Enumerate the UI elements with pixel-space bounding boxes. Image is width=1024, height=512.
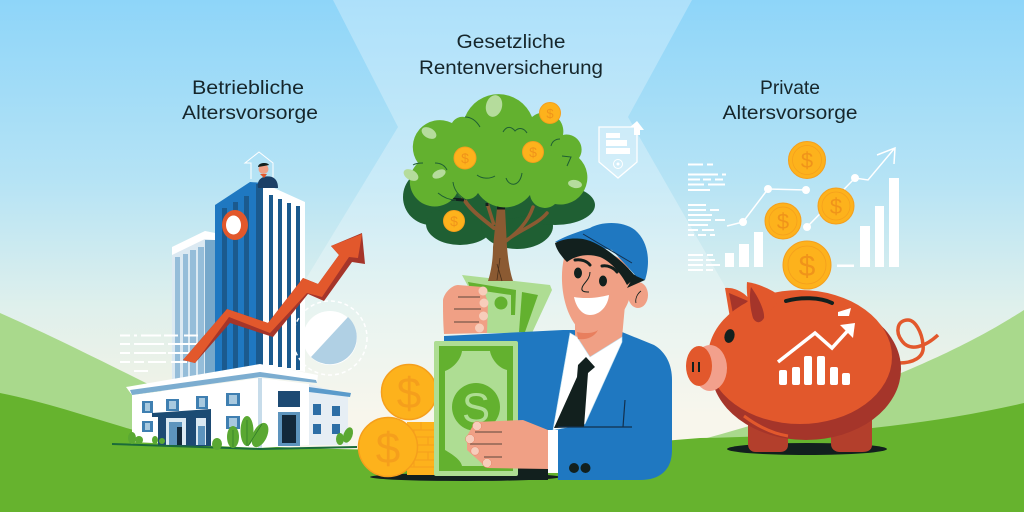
icon: blue suit: [444, 330, 672, 480]
icon: person on roof with house outline: [245, 152, 278, 188]
icon: falling coin: $: [801, 148, 813, 173]
icon: large coin: $: [376, 424, 400, 473]
title: Gesetzliche Rentenversicherung: [419, 31, 603, 79]
icon: falling coin: $: [830, 194, 842, 219]
icon: coin on tree: [454, 147, 476, 169]
icon: falling coin: [788, 142, 826, 178]
icon: bushes and ground line: [112, 416, 357, 450]
icon: coin on tree: [444, 210, 464, 232]
icon: large coin: [382, 364, 436, 420]
icon: building entrance: [152, 409, 211, 446]
icon: upper hand: [443, 285, 488, 334]
title: Private Altersvorsorge: Private: [760, 77, 820, 99]
icon: white shirt and collar: [553, 333, 622, 430]
icon: foliage detail lines: [413, 117, 571, 200]
icon: tree trunk and branches: [451, 197, 547, 281]
icon: front banknote: S: [462, 384, 490, 431]
panel: company building with growth arrow: [112, 152, 367, 450]
text lines: data list: [120, 336, 198, 371]
icon: back bills held in hand: [462, 275, 552, 333]
icon: large coin: [358, 418, 418, 476]
icon: coin on tree: $: [450, 213, 458, 229]
icon: coin on tree: $: [461, 150, 469, 166]
icon: right wing of lower building: [309, 384, 351, 445]
icon: suit pocket and buttons: [558, 400, 632, 473]
title: Betriebliche Altersvorsorge: Altersvorsorge: [182, 102, 318, 124]
icon: black tie: [554, 357, 595, 428]
icon: green tree crown: [410, 94, 587, 208]
icon: blue cap: [555, 223, 648, 285]
icon: pension shield: [599, 121, 644, 178]
icon: coin on tree: [522, 142, 544, 162]
icon: coin on tree: $: [546, 106, 554, 121]
icon: lower white building: [126, 364, 318, 448]
icon: falling coin: [783, 241, 831, 289]
icon: coin on tree: $: [529, 144, 537, 160]
right light hill: [707, 310, 1024, 470]
icon: ground shadow: [370, 468, 560, 481]
arrow: rising red arrow: [183, 233, 365, 363]
title: Private Altersvorsorge: Altersvorsorge: [722, 102, 858, 124]
icon: lower hand and cuff: [466, 420, 558, 473]
left light hill: [0, 313, 230, 460]
bar chart: left bars: [725, 232, 763, 267]
icon: large coin: $: [397, 369, 421, 418]
bar chart: right bars: [837, 178, 899, 267]
icon: falling coin: $: [777, 209, 789, 234]
line chart: left line: [727, 186, 810, 226]
icon: main blue tower: [215, 182, 305, 375]
line chart: right rising arrow: [804, 148, 895, 230]
icon: front banknote: [434, 341, 518, 476]
green ground: [0, 393, 1024, 512]
title: Betriebliche Altersvorsorge: [182, 77, 318, 124]
title: Betriebliche Altersvorsorge: Betriebliche: [192, 77, 304, 99]
text lines: data list: [688, 164, 726, 270]
icon: man's head: [562, 240, 648, 339]
panel: man holding money: [358, 223, 672, 481]
icon: dark back foliage: [403, 160, 595, 249]
icon: light leaves: [402, 93, 583, 189]
icon: falling coin: $: [799, 250, 816, 283]
icon: coin on tree: [540, 102, 560, 124]
icon: falling coin: [818, 188, 854, 224]
panel: piggy bank and charts: [686, 142, 938, 455]
title: Gesetzliche Rentenversicherung: Rentenversicherung: [419, 57, 603, 79]
title: Private Altersvorsorge: [722, 77, 858, 124]
icon: coin stack: [407, 422, 435, 475]
icon: back tower: [172, 231, 215, 380]
title: Gesetzliche Rentenversicherung: Gesetzliche: [456, 31, 566, 53]
icon: neck: [575, 305, 625, 358]
icon: piggy bank: [686, 282, 938, 455]
panel: money tree: [402, 93, 644, 281]
icon: falling coin: [765, 203, 801, 239]
background light beam: [190, 0, 830, 470]
icon: pie chart: [293, 301, 367, 375]
